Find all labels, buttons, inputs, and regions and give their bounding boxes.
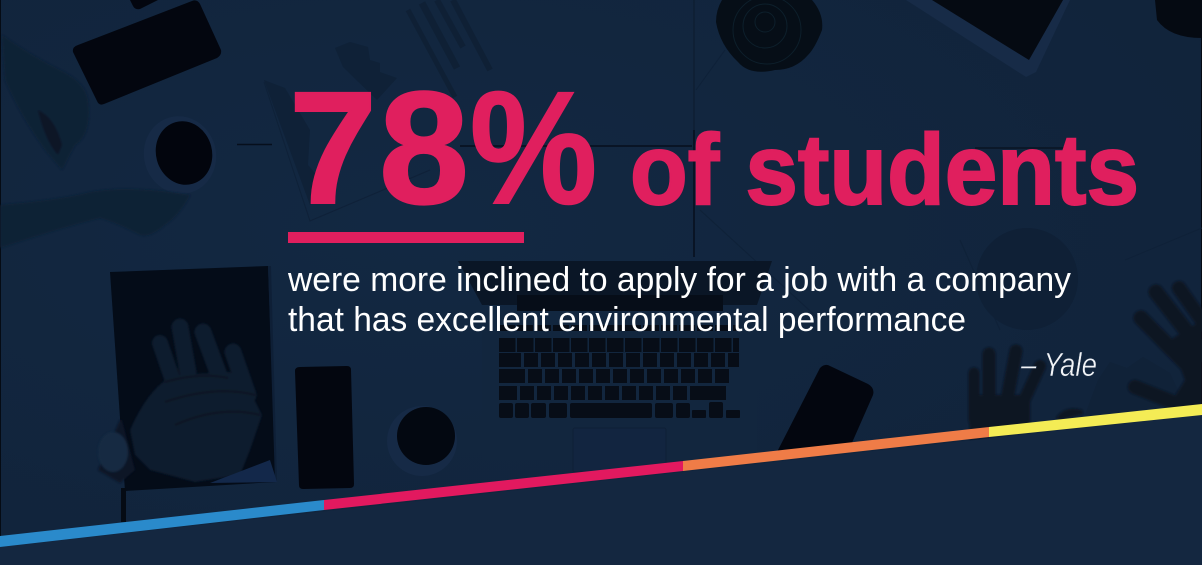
photo: hand left holding cup (0, 189, 190, 248)
photo: notebook strap (121, 488, 126, 522)
band: yellow segment (989, 404, 1202, 437)
body line 2: that has excellent environmental performance (288, 301, 966, 339)
photo: laptop (458, 261, 772, 472)
band: orange segment (683, 427, 989, 471)
photo: dark circle (976, 228, 1078, 330)
photo: cup top right (1155, 0, 1202, 38)
heading remainder: of students (630, 114, 1139, 226)
photo: hand top left (2, 35, 89, 170)
heading: 78% of students (289, 58, 1139, 237)
band: pink segment (324, 461, 683, 510)
photo: clasped hands and watch (98, 327, 262, 483)
photo: sleeve (210, 460, 277, 483)
big number (289, 58, 597, 237)
band: blue segment (0, 500, 324, 547)
big number: 7 (289, 58, 377, 237)
photo: fingers centre (969, 351, 1040, 440)
photo: chart on paper (264, 42, 397, 205)
photo: tablet top right (906, 0, 1070, 77)
photo: phone bottom (295, 366, 354, 489)
photo: paper sheets (264, 50, 1202, 330)
photo: table lines (237, 0, 1066, 257)
photo: phone right (777, 365, 873, 452)
source attribution: – Yale (1020, 346, 1097, 383)
bottom panel below the diagonal (0, 415, 1202, 565)
photo: paper gear right (1085, 357, 1180, 420)
body line 1: were more inclined to apply for a job with a company (287, 261, 1071, 299)
photo: small phone top (130, 0, 158, 9)
photo: phone top left (73, 0, 221, 105)
photo: pens (408, 0, 490, 97)
diagonal colour band (0, 404, 1202, 547)
laptop keyboard (499, 328, 739, 393)
big number: % (470, 58, 597, 237)
photo: coffee cup left (135, 108, 225, 202)
photo: succulent (716, 0, 822, 72)
big number: 8 (379, 58, 469, 237)
body text (287, 261, 1071, 339)
photo: notebook (110, 266, 276, 491)
underline below number (288, 232, 524, 243)
photo: coffee cup bottom (387, 406, 457, 476)
photo: hand far right (1056, 288, 1202, 420)
